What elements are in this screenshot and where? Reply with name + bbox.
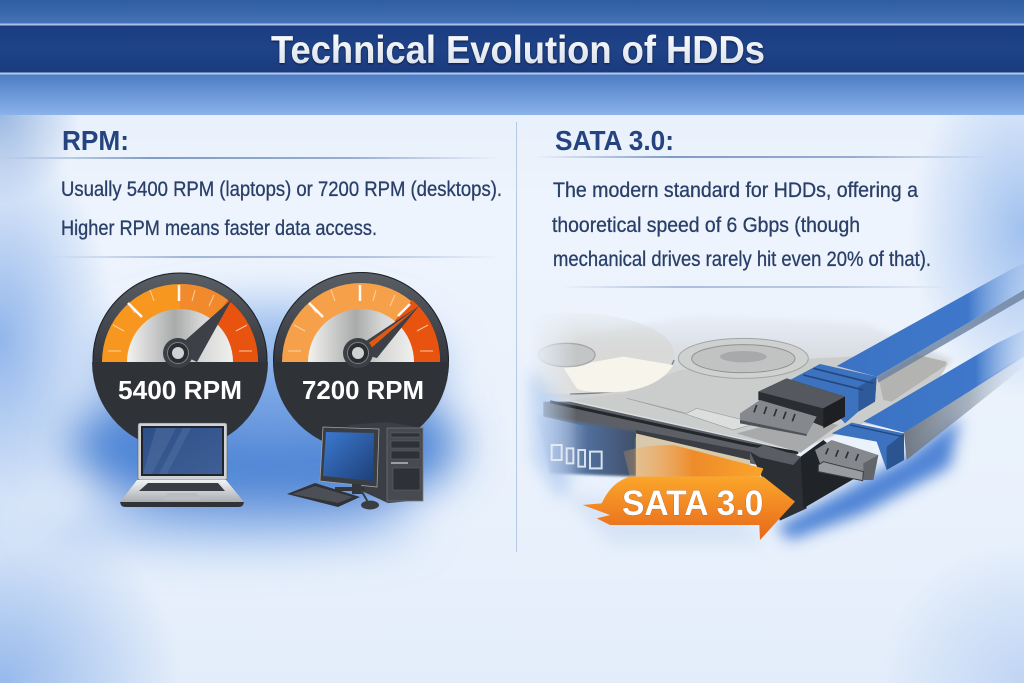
platter and spindle [678,338,808,378]
icon: desktop computer [287,422,423,510]
orange swoosh [623,445,763,477]
RPM description: Higher RPM means faster data access. [61,217,377,240]
callout: SATA 3.0: SATA 3.0 [622,484,763,523]
RPM description [61,178,502,240]
callout: SATA 3.0 [583,477,795,540]
blue cables [877,290,1024,383]
SATA description: The modern standard for HDDs, offering a [553,179,918,202]
title: Technical Evolution of HDDs [271,29,765,72]
SATA description [552,179,931,271]
blue glow [530,370,960,543]
panel: RPM [0,125,502,547]
title banner [0,24,1024,74]
gauge: 7200 RPM [273,272,449,450]
heading: RPM: RPM: [62,125,129,156]
gauge: 5400 RPM [92,272,268,450]
blue glow behind gauges [40,305,460,547]
drive top plate [540,315,953,450]
column divider [516,122,517,552]
upper connector [790,364,877,423]
icon: laptop [120,423,244,507]
SATA description: mechanical drives rarely hit even 20% of that). [553,248,931,271]
illustration: hard drive with SATA cables [466,263,1024,543]
panel: SATA 3.0 [524,130,1024,550]
gauge label: 7200 RPM [302,375,424,405]
drive front edge [543,402,797,465]
heading: SATA 3.0: SATA 3.0: [555,125,674,156]
SATA description: thooretical speed of 6 Gbps (though [552,214,860,237]
drive body, faded at the left [538,318,952,478]
RPM description: Usually 5400 RPM (laptops) or 7200 RPM (desktops). [61,178,502,201]
drive corner bumper [750,445,807,521]
lower connector [832,423,904,470]
gauge label: 5400 RPM [118,375,242,405]
